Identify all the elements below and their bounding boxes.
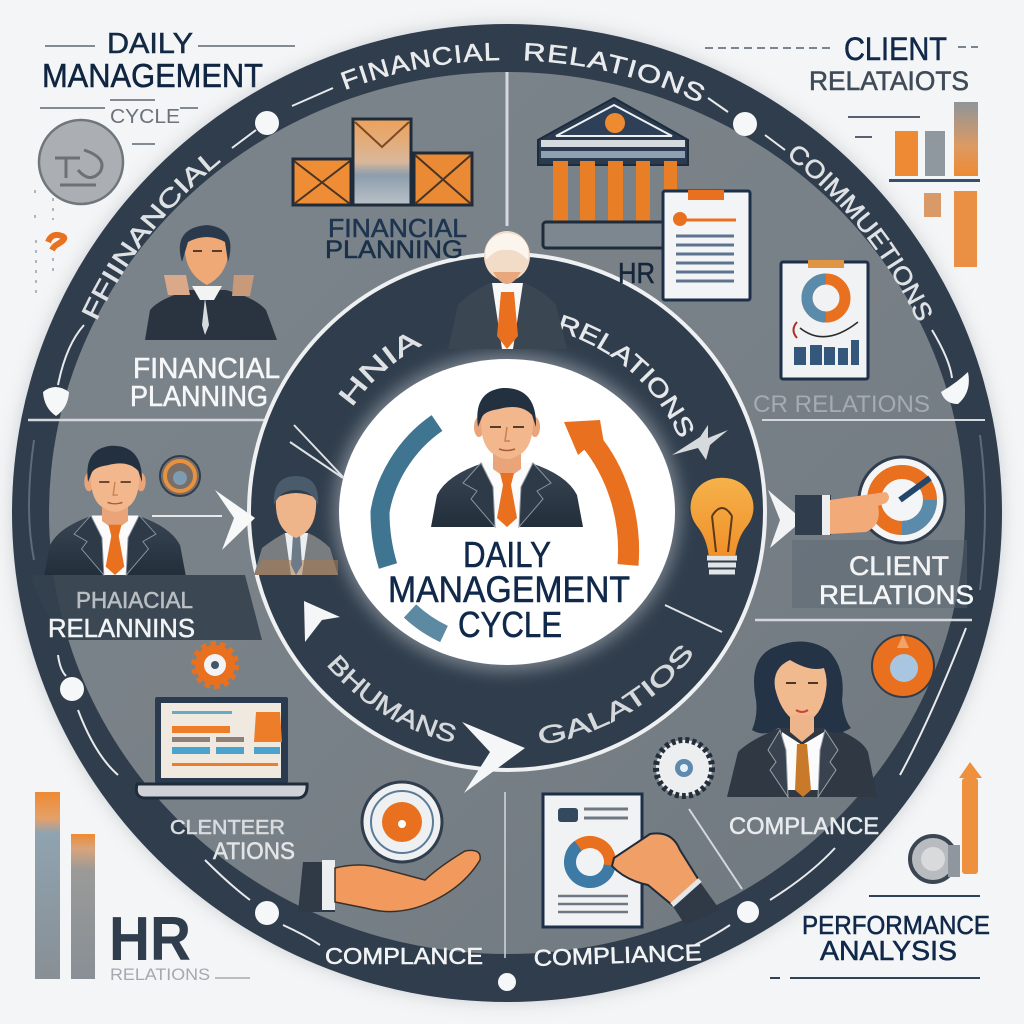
icon: gray gear: [910, 836, 960, 882]
icon: open hand: [298, 850, 480, 912]
person: central manager: [431, 388, 583, 527]
icon: orange gear: [195, 645, 235, 685]
outer ring label: ffiinancial: FFIINANCIAL: [82, 156, 221, 320]
section label: financial planning white: PLANNING: [130, 381, 268, 413]
person: left manager: [44, 446, 186, 575]
header: daily management cycle: DAILY: [107, 28, 193, 60]
section label: financial planning dark: [325, 213, 467, 264]
HR label: bottom left: RELATIONS: [110, 965, 210, 984]
label: performance analysis: [770, 896, 990, 978]
ring nodes: [43, 111, 969, 991]
header: client relations: CLIENT: [844, 31, 947, 67]
outer ring label: communications: COIMMUETIONS: [790, 146, 932, 320]
arrow: left flow: [152, 490, 255, 550]
inner ring label: hnia: HNIA: [338, 334, 422, 406]
icon: bank building: [538, 98, 688, 248]
outer ring label: relations: RELATIONS: [524, 42, 704, 101]
central arc arrows: [380, 420, 629, 634]
icon: star: [672, 425, 728, 460]
label: clenteer ations: [170, 817, 295, 865]
band: financial relannins: PHAIACIAL: [76, 587, 193, 613]
HR label: bottom left: HR: [109, 905, 191, 974]
label: clenteer ations: CLENTEER: [170, 817, 285, 839]
arrow: bottom flow: [462, 722, 525, 793]
header: daily management cycle: CYCLE: [110, 106, 180, 128]
icon: laptop with chart: [136, 697, 307, 798]
section label: financial planning dark: PLANNING: [325, 236, 463, 264]
icon: light bulb: [690, 477, 754, 581]
icon: report with hand: [543, 794, 720, 927]
header: client relations: RELATAIOTS: [809, 66, 969, 96]
icon: clipboard document: [663, 190, 750, 300]
label: performance analysis: PERFORMANCE: [802, 910, 990, 940]
label: compliance: COMPLANCE: [729, 813, 879, 840]
icon: orange upward arrow: [959, 762, 982, 874]
person: top bald manager: [448, 231, 567, 349]
center title: DAILY: [463, 534, 551, 575]
band: client relations: CLIENT: [849, 551, 949, 581]
center title: MANAGEMENT: [388, 569, 630, 610]
center title: [388, 534, 630, 645]
band: client relations: [792, 540, 974, 610]
inner ring label: relations: RELATIONS: [560, 314, 694, 437]
ring highlights: [29, 88, 985, 945]
person: small manager in inner ring: [254, 476, 338, 575]
band: financial relannins: RELANNINS: [48, 613, 195, 643]
outer ring label: compliance left: COMPLANCE: [325, 943, 483, 969]
header: daily management cycle: MANAGEMENT: [42, 57, 263, 94]
icon: report clipboard: [781, 260, 868, 379]
outer ring label: compliance right: COMPLIANCE: [533, 939, 702, 971]
label: performance analysis: ANALYSIS: [820, 935, 957, 966]
section label: financial planning dark: FINANCIAL: [328, 213, 467, 243]
center title: CYCLE: [458, 604, 562, 645]
bar chart: top right: [889, 102, 980, 267]
person: woman: [727, 641, 877, 797]
band: client relations: RELATIONS: [819, 580, 974, 610]
section label: financial planning white: [130, 353, 280, 413]
small orange marks: [35, 190, 64, 300]
arrow: right flow: [768, 490, 803, 548]
section label: financial planning white: FINANCIAL: [133, 353, 280, 385]
header: client relations: [705, 31, 978, 137]
HR label: bottom left: [109, 905, 250, 984]
icon: hand pointing at target: [795, 457, 945, 543]
icon: envelopes: [293, 119, 472, 205]
inner ring label: humans: BHUMANS: [327, 654, 456, 742]
label: clenteer ations: ATIONS: [213, 838, 295, 865]
panel: inner ring: [249, 254, 765, 770]
bar chart: bottom left: [35, 792, 95, 979]
arrow: upper-left flow: [304, 601, 340, 642]
header: daily management cycle: [40, 28, 295, 144]
inner ring label: galatios: GALATIOS: [539, 646, 692, 744]
label: HR: HR: [618, 258, 655, 290]
icon: white gear: [656, 740, 712, 796]
icon: small orange badge: [160, 456, 200, 496]
label: CR relations: CR RELATIONS: [753, 391, 930, 418]
icon: target: [362, 782, 442, 862]
icon: coin: [39, 120, 123, 204]
outer ring label: financial: FINANCIAL: [340, 42, 500, 90]
person: top-left manager with raised hands: [145, 225, 277, 340]
icon: orange donut: [872, 635, 934, 697]
band: financial relannins: [31, 575, 262, 643]
